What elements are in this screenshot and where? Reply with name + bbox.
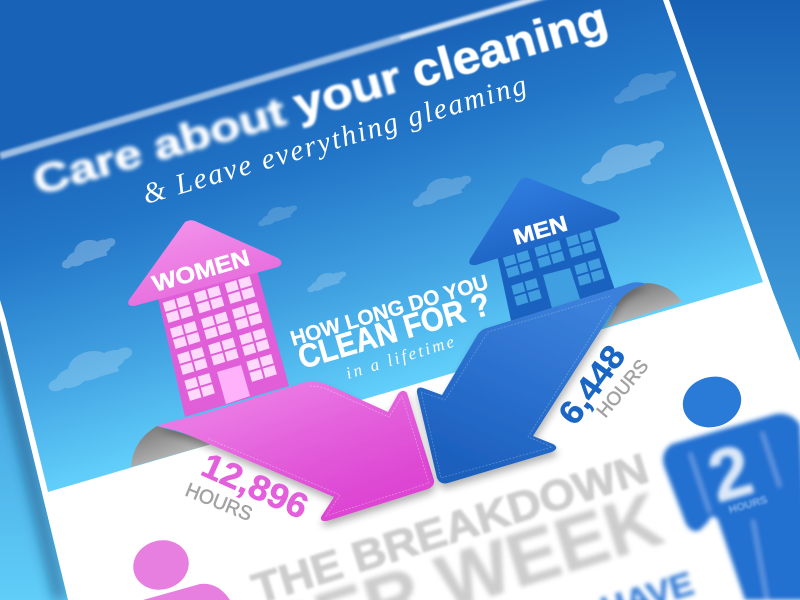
men curl underside: [606, 283, 682, 327]
cloud 6: [575, 133, 669, 187]
clouds: [42, 65, 680, 394]
women arrow stitching: [207, 386, 429, 516]
cloud 1: [57, 233, 119, 270]
question line 3: in a lifetime: [344, 332, 457, 383]
men door: [543, 268, 590, 338]
men roof: [469, 178, 620, 265]
question line 1: HOW LONG DO YOU: [288, 271, 491, 351]
women windows: [163, 276, 277, 401]
subtitle: & Leave everything gleaming: [139, 69, 530, 211]
women building: [128, 220, 289, 417]
cloud 7: [609, 65, 680, 106]
men body: [663, 414, 800, 600]
title words: Care about: Care about: [28, 90, 290, 204]
cloud 4: [42, 340, 137, 394]
question line 2: CLEAN FOR ?: [294, 285, 494, 376]
men head: [677, 370, 747, 434]
men windows: [503, 230, 605, 306]
cloud 5: [408, 170, 475, 209]
title: [28, 0, 613, 204]
men tower: [497, 228, 620, 330]
12,896: 12,896: [196, 446, 314, 527]
women head: [127, 534, 195, 596]
women label: WOMEN: [149, 244, 253, 297]
men arrow stitching: [421, 296, 612, 478]
hours label women: HOURS: [182, 479, 255, 526]
men arrow: [417, 282, 647, 483]
question heading: [288, 271, 494, 383]
men building: [469, 178, 620, 338]
women hours: [182, 446, 314, 527]
title word: your: your: [288, 52, 407, 130]
women tower: [158, 270, 289, 417]
women figure: [127, 534, 230, 600]
6,448: 6,448: [551, 338, 632, 431]
blurred header stripe: [0, 0, 548, 156]
women roof: [128, 220, 282, 306]
women body: [143, 584, 230, 600]
poster shadow: [0, 320, 60, 600]
breakdown heading: [247, 445, 672, 600]
cloud 3: [304, 268, 349, 294]
women door: [217, 365, 250, 404]
women arrow: [157, 382, 434, 521]
men figure hours number: 2: [700, 430, 761, 518]
men label: MEN: [510, 211, 570, 250]
men figure: [663, 370, 800, 600]
hours label men: HOURS: [593, 356, 653, 422]
women curl underside: [131, 426, 215, 467]
cloud 2: [255, 202, 300, 228]
panel: sky: [0, 0, 763, 492]
men figure hours caption: HOURS: [727, 494, 769, 516]
men hours: [551, 338, 653, 431]
